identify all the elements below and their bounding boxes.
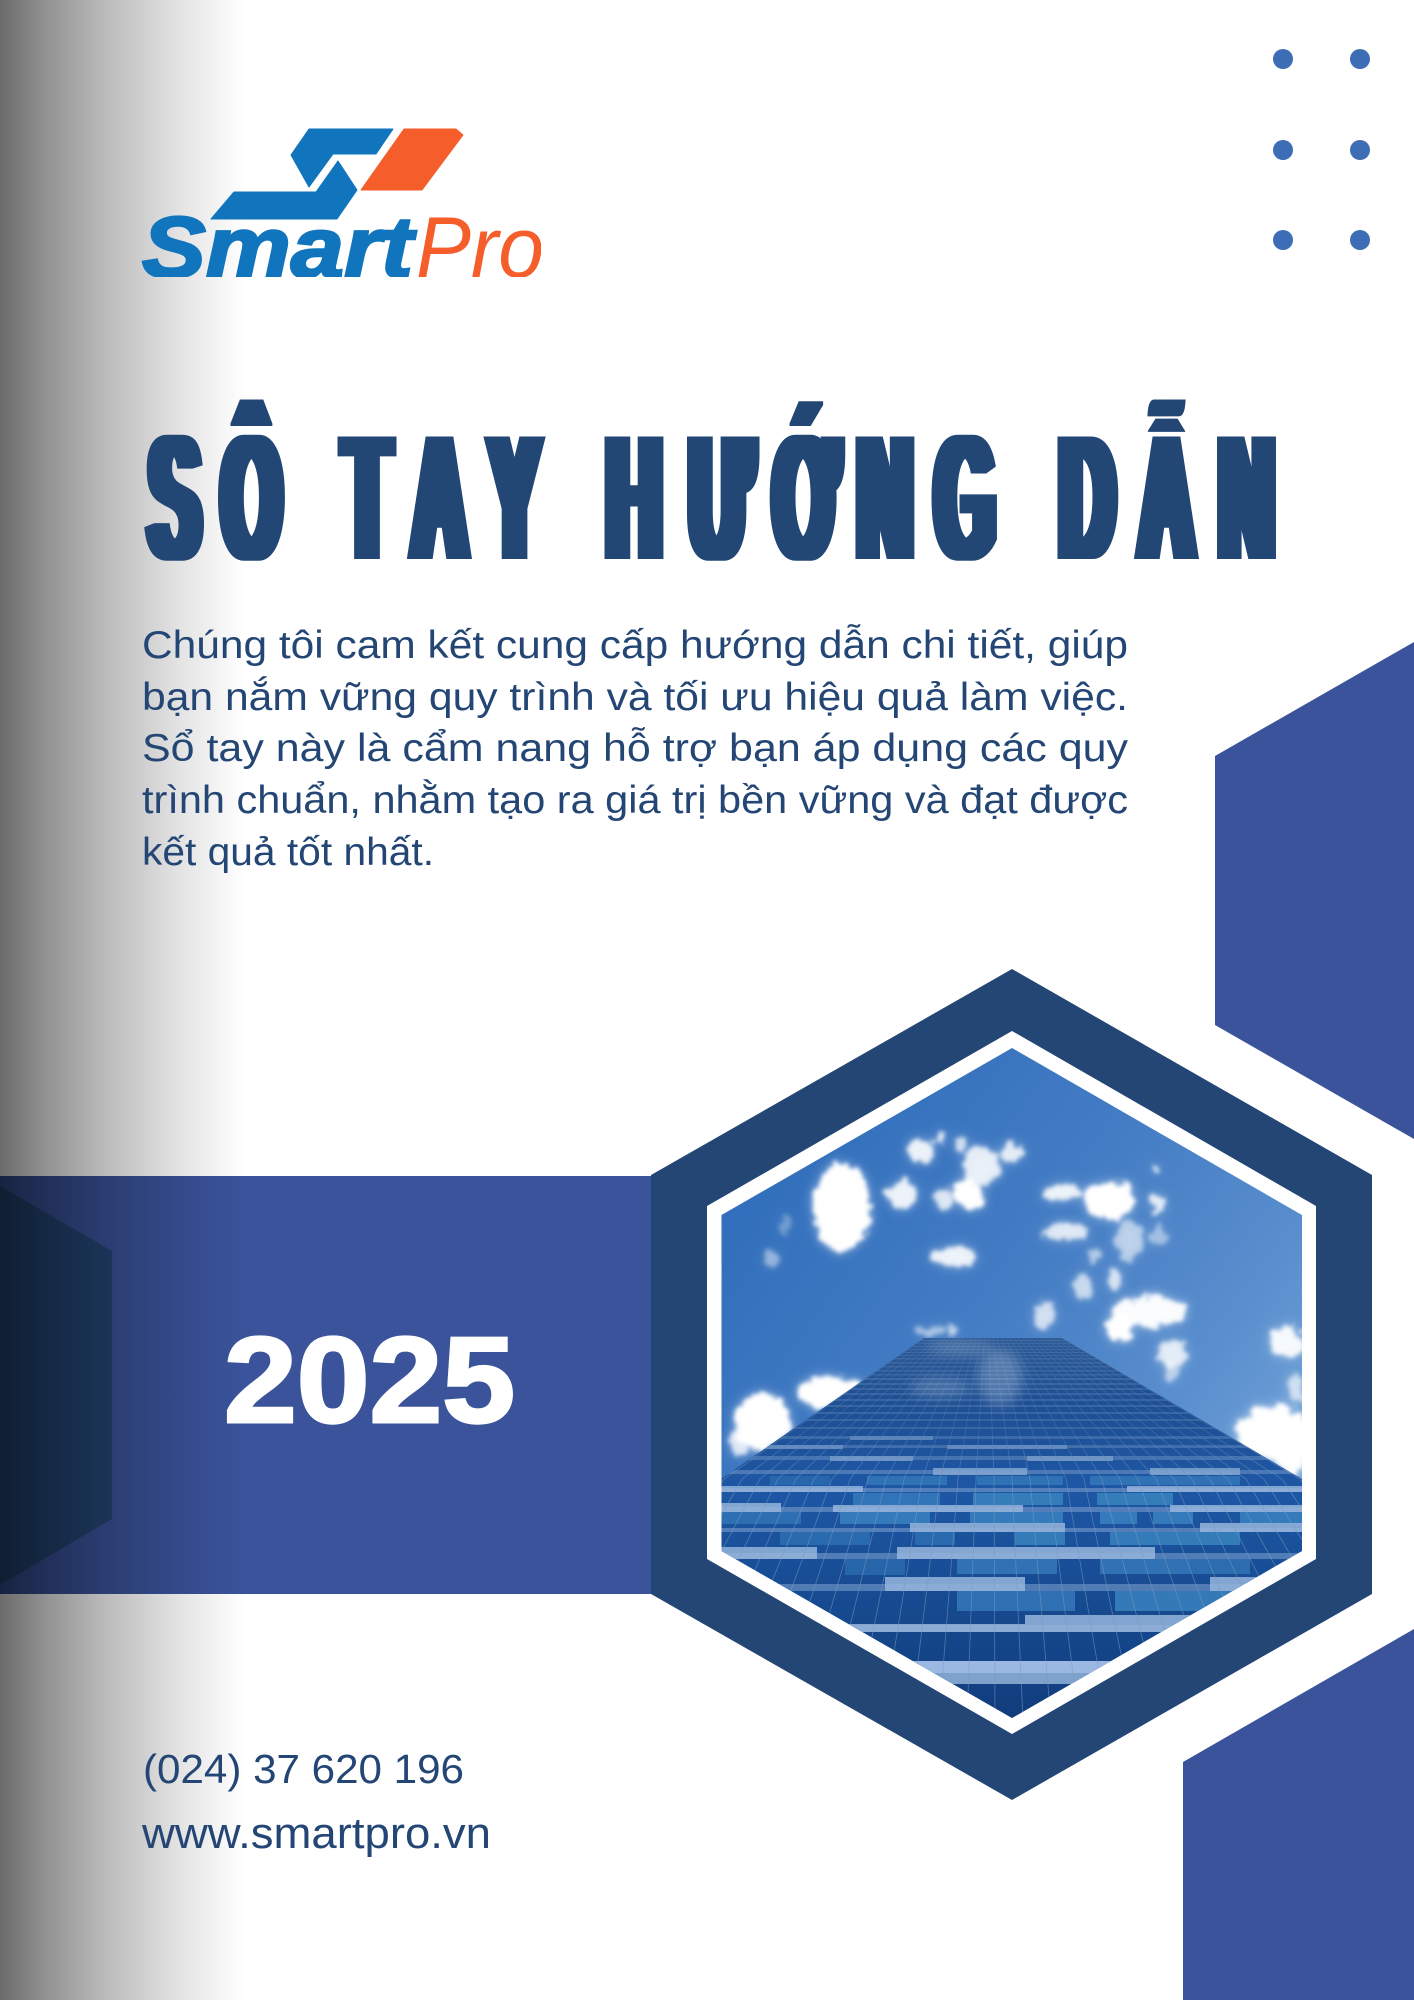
intro paragraph: Chúng tôi cam kết cung cấp hướng dẫn chi tiết, giúp <box>142 624 1128 667</box>
band behind year <box>0 1176 660 1594</box>
intro paragraph: bạn nắm vững quy trình và tối ưu hiệu quả làm việc. <box>142 676 1128 719</box>
floor spandrels <box>721 1340 1303 1632</box>
facade base <box>721 1338 1303 1720</box>
top right hexagon <box>1215 642 1414 1139</box>
logo wordmark <box>142 215 541 277</box>
sky reflections <box>910 1342 1022 1406</box>
logo wordmark: Pro <box>416 200 544 296</box>
lowest spandrel <box>913 1661 1110 1673</box>
logo wordmark: Smart <box>142 200 417 296</box>
logo mark upper blue <box>291 129 393 187</box>
logo mark orange <box>361 129 463 190</box>
upper facade darkening <box>730 1338 1292 1475</box>
intro paragraph: trình chuẩn, nhằm tạo ra giá trị bền vững và đạt được <box>142 779 1128 822</box>
tower facade <box>722 1338 1302 1718</box>
title: SÔ TAY HƯỚNG DẪN <box>150 397 1274 597</box>
white hexagon frame <box>707 1031 1316 1734</box>
bottom right hexagon <box>1183 1629 1414 2000</box>
mullions <box>722 1338 1302 1712</box>
dark hexagon frame <box>651 969 1372 1800</box>
intro paragraph: Sổ tay này là cẩm nang hỗ trợ bạn áp dụng các quy <box>142 727 1129 770</box>
light spandrel segments <box>721 1436 1302 1632</box>
phone number: (024) 37 620 196 <box>143 1746 464 1792</box>
decorative dots <box>1273 49 1370 250</box>
sky <box>721 1048 1303 1720</box>
logo mark lower blue <box>211 161 357 219</box>
lighter windows <box>721 1476 1302 1611</box>
logo: SmartPro <box>142 128 541 277</box>
website: www.smartpro.vn <box>141 1809 491 1858</box>
year: 2025 <box>224 1312 515 1448</box>
hexagon photo: tower against the sky <box>722 1048 1302 1718</box>
intro paragraph <box>142 624 1129 874</box>
left edge shading <box>0 0 245 2000</box>
intro paragraph: kết quả tốt nhất. <box>142 831 434 874</box>
clouds <box>731 1132 1308 1475</box>
left dark hexagon <box>0 1186 112 1585</box>
